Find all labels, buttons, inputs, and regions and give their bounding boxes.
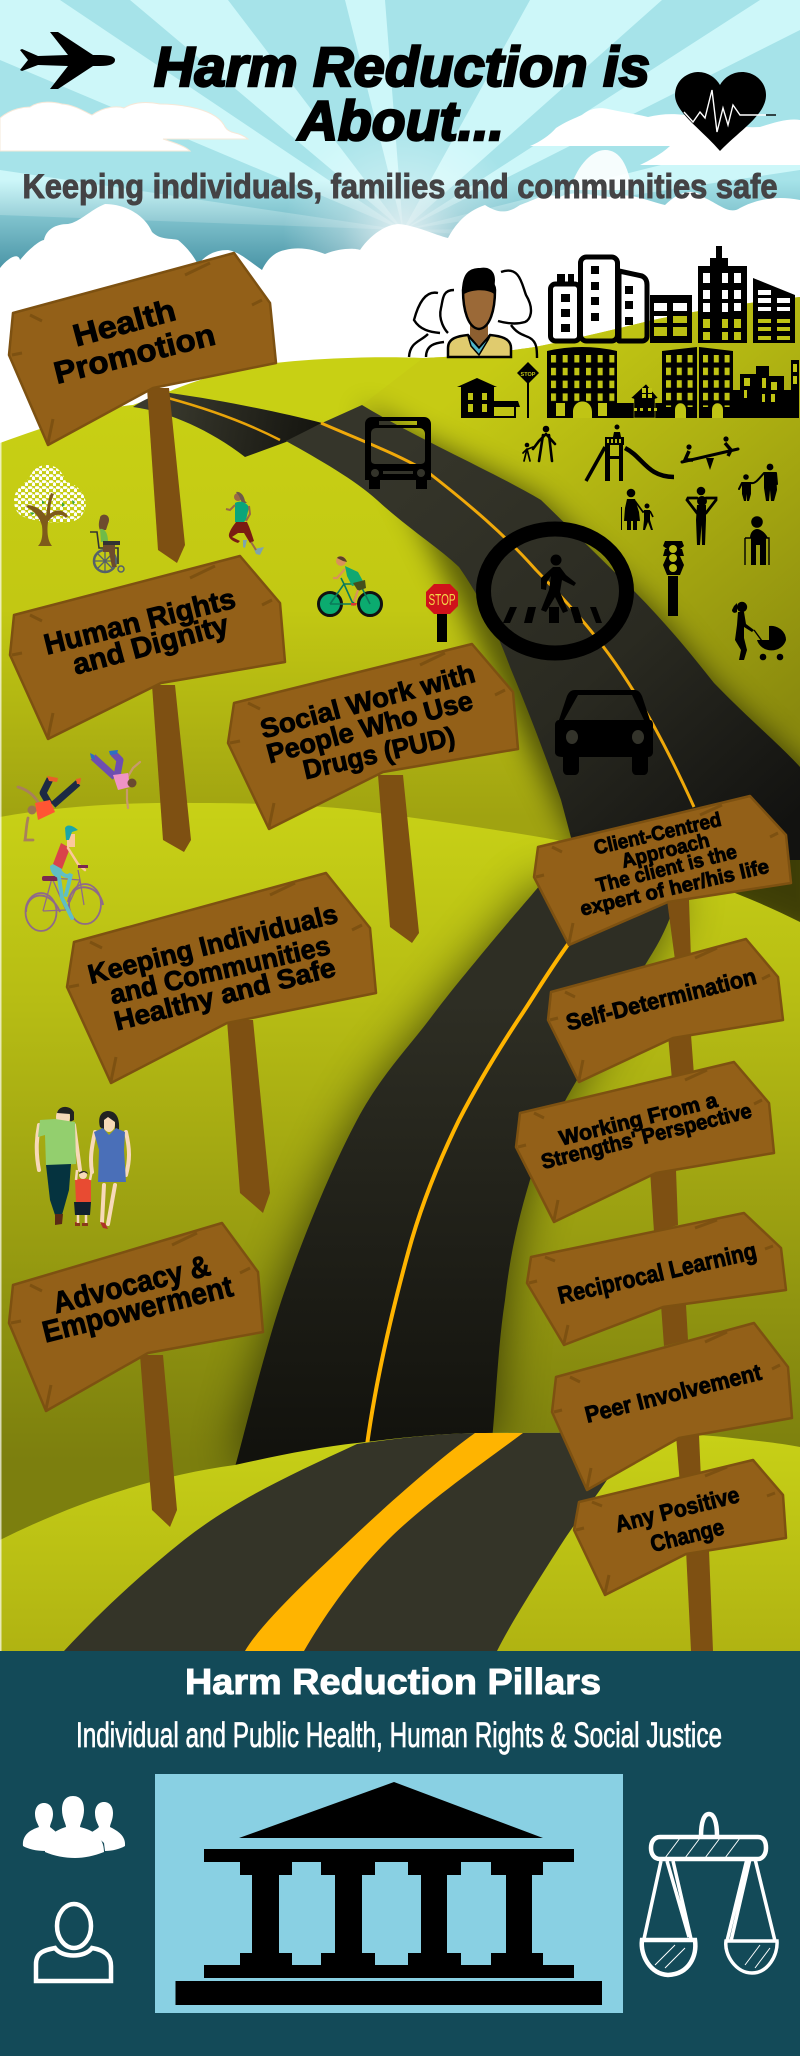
sign: Client-Centred Approach: Client-Centred — [592, 809, 723, 859]
road: middle section — [235, 885, 680, 1467]
icon: tree — [14, 465, 86, 546]
sign: Reciprocal Learning: Reciprocal Learning — [555, 1238, 759, 1310]
sign: Working From a Strengths' Perspective: Strengths' Perspective — [539, 1099, 754, 1174]
clouds — [0, 102, 800, 470]
signpost: lower right stack posts — [650, 900, 713, 1651]
icon: breakdancer in pink — [90, 750, 140, 808]
sign: Advocacy and Empowerment — [9, 1223, 263, 1527]
sign: Advocacy and Empowerment: Advocacy & — [50, 1249, 214, 1320]
icon: people group with central woman — [409, 268, 537, 358]
sign: Human Rights and Dignity: Human Rights — [41, 583, 239, 662]
sign: Keeping Individuals and Communities Healthy and Safe: and Communities — [107, 930, 333, 1010]
sign: Social Work with People Who Use Drugs: Drugs (PUD) — [300, 721, 458, 785]
sign: Social Work with People Who Use Drugs — [228, 644, 518, 943]
icon: single person outline — [36, 1904, 111, 1981]
icon: breakdancer in red — [18, 776, 81, 840]
sign: Keeping Individuals and Communities Healthy and Safe: Healthy and Safe — [111, 952, 339, 1036]
sign: Any Positive Change: Change — [648, 1514, 727, 1557]
heading: pillars: Harm Reduction Pillars — [185, 1661, 601, 1702]
sign: Advocacy and Empowerment: Empowerment — [39, 1270, 236, 1349]
sign: Keeping Individuals and Communities Healthy and Safe — [67, 873, 376, 1213]
title: Harm Reduction is — [154, 35, 650, 98]
hill: front — [0, 1432, 800, 1651]
icon: family — [37, 1107, 129, 1229]
icon: person in wheelchair — [90, 515, 124, 572]
sign: Self-Determination: Self-Determination — [563, 963, 759, 1035]
sign: Social Work with People Who Use Drugs: People Who Use — [263, 685, 476, 769]
sign: Any Positive Change — [574, 1460, 786, 1595]
icon: adult and child — [523, 426, 555, 461]
icon: playground slide — [586, 424, 674, 481]
sign: Peer Involvement — [552, 1323, 792, 1490]
title: About... — [296, 89, 504, 152]
icon: cyclist in green — [318, 556, 382, 616]
road: upper section — [133, 393, 800, 950]
sign: Human Rights and Dignity: and Dignity — [69, 609, 232, 681]
icon: airplane — [20, 32, 115, 89]
sign: Keeping Individuals and Communities Healthy and Safe: Keeping Individuals — [85, 899, 341, 990]
title — [154, 35, 650, 152]
icon: stop sign red: STOP — [428, 592, 456, 609]
sign: Any Positive Change: Any Positive — [612, 1481, 742, 1537]
sign: Social Work with People Who Use Drugs: Social Work with — [257, 658, 478, 744]
icon: grandmother and child — [621, 489, 653, 530]
icon: scales of justice — [642, 1814, 777, 1975]
icon: runner — [226, 492, 264, 555]
icon: mother with stroller — [732, 602, 786, 660]
icon: city blocks lower — [547, 347, 799, 418]
sign: Client-Centred Approach — [534, 796, 791, 945]
pictograms: people in the park — [523, 424, 786, 660]
icon: bus — [365, 417, 431, 489]
sky with sun rays — [0, 0, 800, 460]
sign: Client-Centred Approach: The client is the — [594, 841, 739, 897]
icon: house with garage — [457, 378, 520, 418]
icon: pedestrian crossing sign — [484, 529, 626, 653]
left edge highlight — [0, 440, 2, 1651]
icon: man and child holding hands — [739, 464, 777, 501]
icon: small stop sign — [517, 362, 539, 418]
sign: Working From a Strengths' Perspective: Working From a — [557, 1089, 720, 1150]
panel: harm reduction pillars — [0, 1651, 800, 2056]
sign: Health Promotion: Promotion — [50, 317, 219, 391]
icon: small stop sign: STOP — [521, 372, 536, 378]
icon: stop sign red — [426, 584, 458, 642]
icon: cyclist in purple frame — [26, 826, 103, 931]
sign: Peer Involvement: Peer Involvement — [582, 1359, 764, 1428]
road: foreground section — [64, 1432, 620, 1651]
sign: Health Promotion: Health — [69, 292, 180, 353]
hill: middle — [0, 803, 800, 1651]
icon: man carrying child on shoulders — [687, 487, 716, 545]
icon: city skyline upper — [550, 246, 795, 343]
sign: Reciprocal Learning — [527, 1213, 786, 1345]
icon: traffic light — [663, 541, 684, 616]
sign: Client-Centred Approach: expert of her/his life — [578, 856, 771, 921]
icon: temple on blue panel — [155, 1774, 623, 2013]
hills background — [0, 297, 800, 1000]
sign: Client-Centred Approach: Approach — [619, 830, 712, 873]
icon: elder with walker — [745, 516, 769, 565]
sign: Health Promotion — [9, 253, 276, 563]
icon: group of people — [23, 1796, 125, 1858]
icon: heart with pulse — [675, 72, 776, 151]
sign: Self-Determination — [548, 939, 783, 1082]
sign: Human Rights and Dignity — [10, 556, 285, 852]
icon: seesaw — [682, 436, 738, 470]
icon: car — [555, 690, 653, 775]
sign: Working From a Strengths' Perspective — [516, 1062, 774, 1222]
